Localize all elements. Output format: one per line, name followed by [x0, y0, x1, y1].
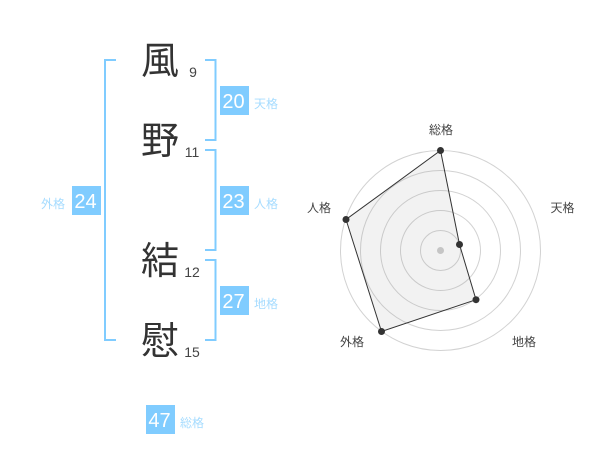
- score box: 天格 20: [220, 86, 249, 115]
- score box: 総格 47: 47: [148, 410, 171, 432]
- radar chart: 外格: [340, 334, 364, 349]
- radar chart: 天格: [550, 200, 575, 215]
- radar chart: 総格: [429, 122, 453, 137]
- kanji: 慰: 慰: [141, 321, 179, 363]
- kanji: 野: 野: [141, 121, 179, 163]
- label: 外格: 外格: [41, 197, 65, 211]
- label: 天格: 天格: [254, 97, 278, 111]
- score box: 地格 27: 27: [222, 291, 245, 313]
- radar chart: 地格: [512, 334, 536, 349]
- score box: 地格 27: [220, 286, 249, 315]
- score box: 外格 24: 24: [74, 191, 97, 213]
- label: 人格: 人格: [254, 197, 278, 211]
- stroke count: 9: 9: [189, 64, 197, 80]
- kanji: 結: 結: [141, 241, 179, 283]
- score box: 人格 23: [220, 186, 249, 215]
- label: 総格: 総格: [180, 416, 204, 430]
- score box: 外格 24: [72, 186, 101, 215]
- radar chart: 人格: [307, 200, 331, 215]
- stroke count: 11: 11: [185, 144, 199, 160]
- label: 地格: 地格: [254, 297, 278, 311]
- stroke count: 15: 15: [184, 344, 200, 360]
- kanji: 風: 風: [141, 41, 179, 83]
- stroke count: 12: 12: [184, 264, 200, 280]
- score box: 総格 47: [146, 405, 175, 434]
- score box: 人格 23: 23: [222, 191, 245, 213]
- score box: 天格 20: 20: [222, 91, 245, 113]
